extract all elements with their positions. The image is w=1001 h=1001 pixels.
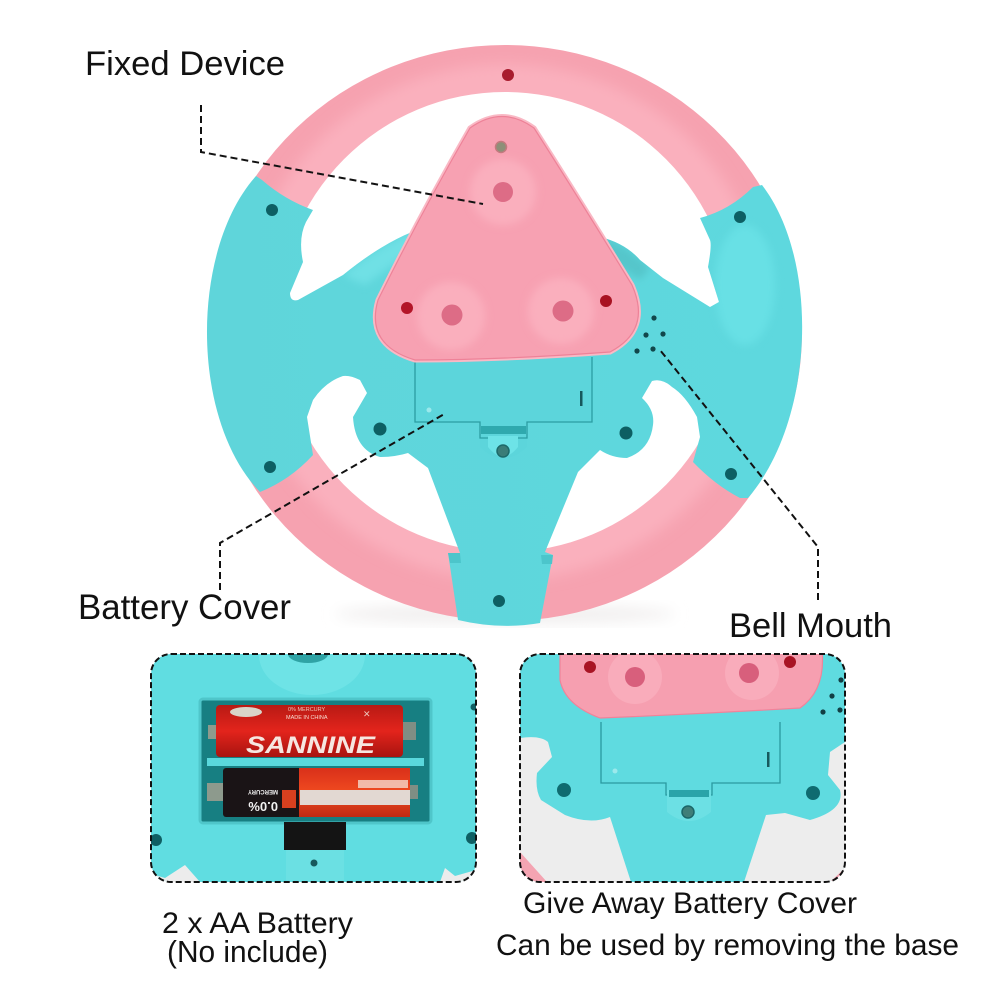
- background gaps: [520, 737, 631, 882]
- pink triangle mount: [375, 116, 638, 360]
- red battery: ✕: [363, 709, 371, 719]
- speaker holes: [634, 315, 666, 354]
- pink ring corners: [520, 852, 845, 882]
- label: Bell Mouth: Bell Mouth: [729, 607, 892, 645]
- black and orange battery: [223, 768, 410, 817]
- red battery: 0% MERCURY: [288, 707, 326, 713]
- battery springs: [208, 725, 216, 739]
- top red screw: [502, 69, 514, 81]
- black tab: [284, 822, 346, 850]
- case screws: [150, 834, 162, 846]
- top oval recess: [259, 654, 365, 695]
- black and orange battery: 0.0%: [248, 799, 278, 814]
- caption: removing the base: Can be used by removing the base: [496, 929, 959, 962]
- panel: battery cover close-up: [520, 646, 845, 882]
- wheel shadow: [335, 604, 675, 624]
- bottom corner gaps: [151, 865, 476, 882]
- battery cover: [415, 357, 592, 458]
- pink mount: [560, 650, 823, 718]
- speaker holes: [838, 677, 844, 683]
- black and orange battery: MERCURY: [248, 788, 278, 794]
- screws on wheel: [264, 204, 746, 607]
- lobe screws: [557, 783, 571, 797]
- compartment: [200, 699, 431, 823]
- latch tab: [667, 790, 711, 821]
- suction cups: [608, 650, 662, 704]
- leader line: fixed device: [201, 105, 483, 204]
- illustration: steering wheel: [207, 45, 802, 626]
- panel: battery compartment: [150, 653, 477, 883]
- caption: Give Away Battery Cover: Give Away Battery Cover: [523, 887, 857, 920]
- bottom mount tabs: [448, 553, 553, 564]
- latch and screw: [286, 850, 344, 882]
- label: Battery Cover: Battery Cover: [78, 588, 291, 627]
- red battery: SANNINE: [246, 732, 376, 759]
- blue wheel body: [207, 176, 802, 626]
- battery cover: [601, 722, 780, 795]
- red battery: MADE IN CHINA: [286, 715, 328, 721]
- pink wheel ring: [208, 45, 802, 621]
- caption: 2 x AA Battery: 2 x AA Battery: [162, 907, 353, 940]
- red battery: [216, 705, 403, 759]
- suction cups: [417, 159, 594, 350]
- body moulding highlights: [343, 225, 775, 345]
- leader line: bell mouth: [660, 350, 818, 600]
- leader line: battery cover: [220, 413, 446, 590]
- label: Fixed Device: Fixed Device: [85, 45, 285, 83]
- caption: No include: (No include): [167, 934, 328, 969]
